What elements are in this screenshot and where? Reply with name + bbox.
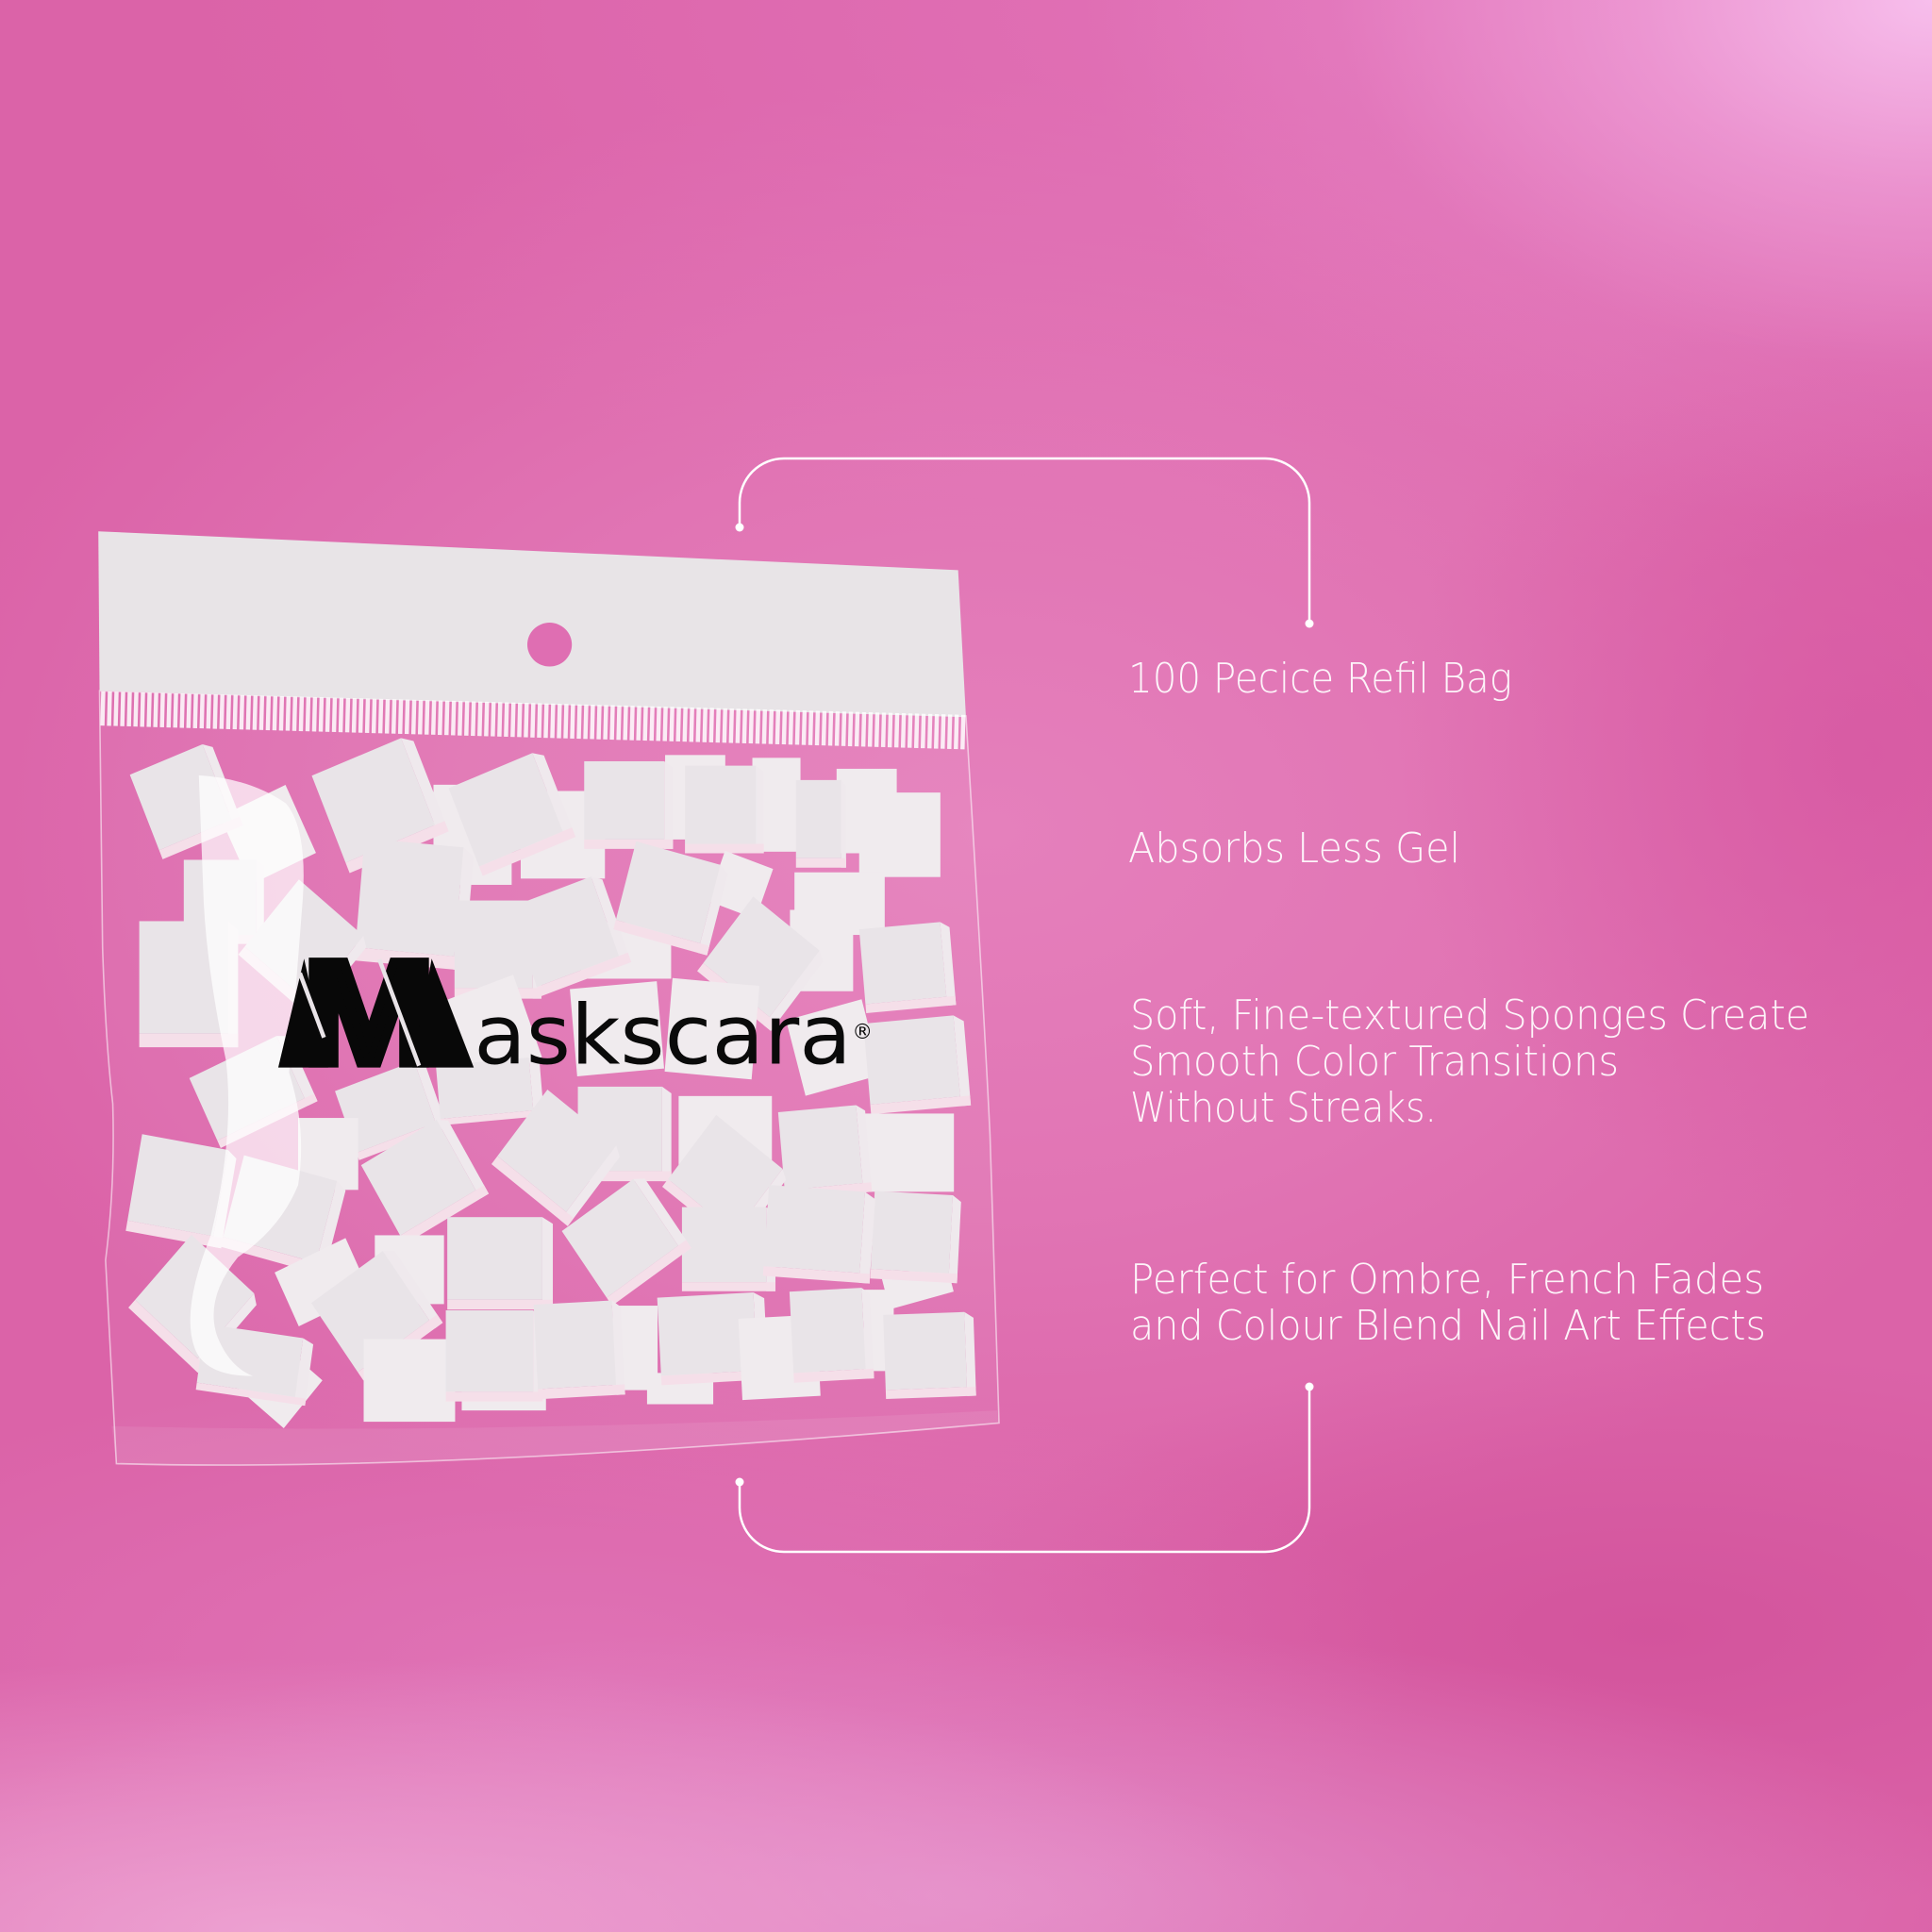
sponge cubes [125, 734, 976, 1428]
feature: soft sponges [1130, 991, 1809, 1132]
bottom connector bracket [736, 1383, 1313, 1552]
logo letter M: M [303, 931, 435, 1095]
logo: Maskscara [278, 931, 873, 1095]
feature: soft sponges: Soft, Fine-textured Sponges Create [1130, 991, 1809, 1040]
logo left flare [278, 958, 328, 1068]
feature: absorbs less gel: Absorbs Less Gel [1128, 824, 1460, 873]
feature: nail art effects: Perfect for Ombre, French Fades [1130, 1256, 1764, 1304]
logo gap left [300, 974, 324, 1038]
product: refill bag [98, 531, 999, 1465]
feature: soft sponges: Without Streaks. [1130, 1084, 1437, 1132]
perforated teeth strip [101, 708, 966, 732]
top connector bracket [736, 458, 1313, 628]
registered mark: ® [852, 1020, 873, 1044]
logo right flare [412, 958, 474, 1068]
bag body [100, 691, 999, 1465]
feature: soft sponges: Smooth Color Transitions [1130, 1038, 1619, 1086]
white glare on plastic [191, 775, 304, 1376]
feature: nail art effects: and Colour Blend Nail Art Effects [1130, 1302, 1766, 1350]
logo word: askscara [474, 988, 852, 1084]
feature: refill bag: 100 Pecice Refil Bag [1128, 655, 1512, 703]
hang hole [527, 623, 572, 666]
feature: nail art effects [1130, 1256, 1766, 1350]
logo gap right [379, 959, 419, 1066]
header card [98, 531, 966, 717]
bottom seal of bag [111, 1410, 999, 1465]
